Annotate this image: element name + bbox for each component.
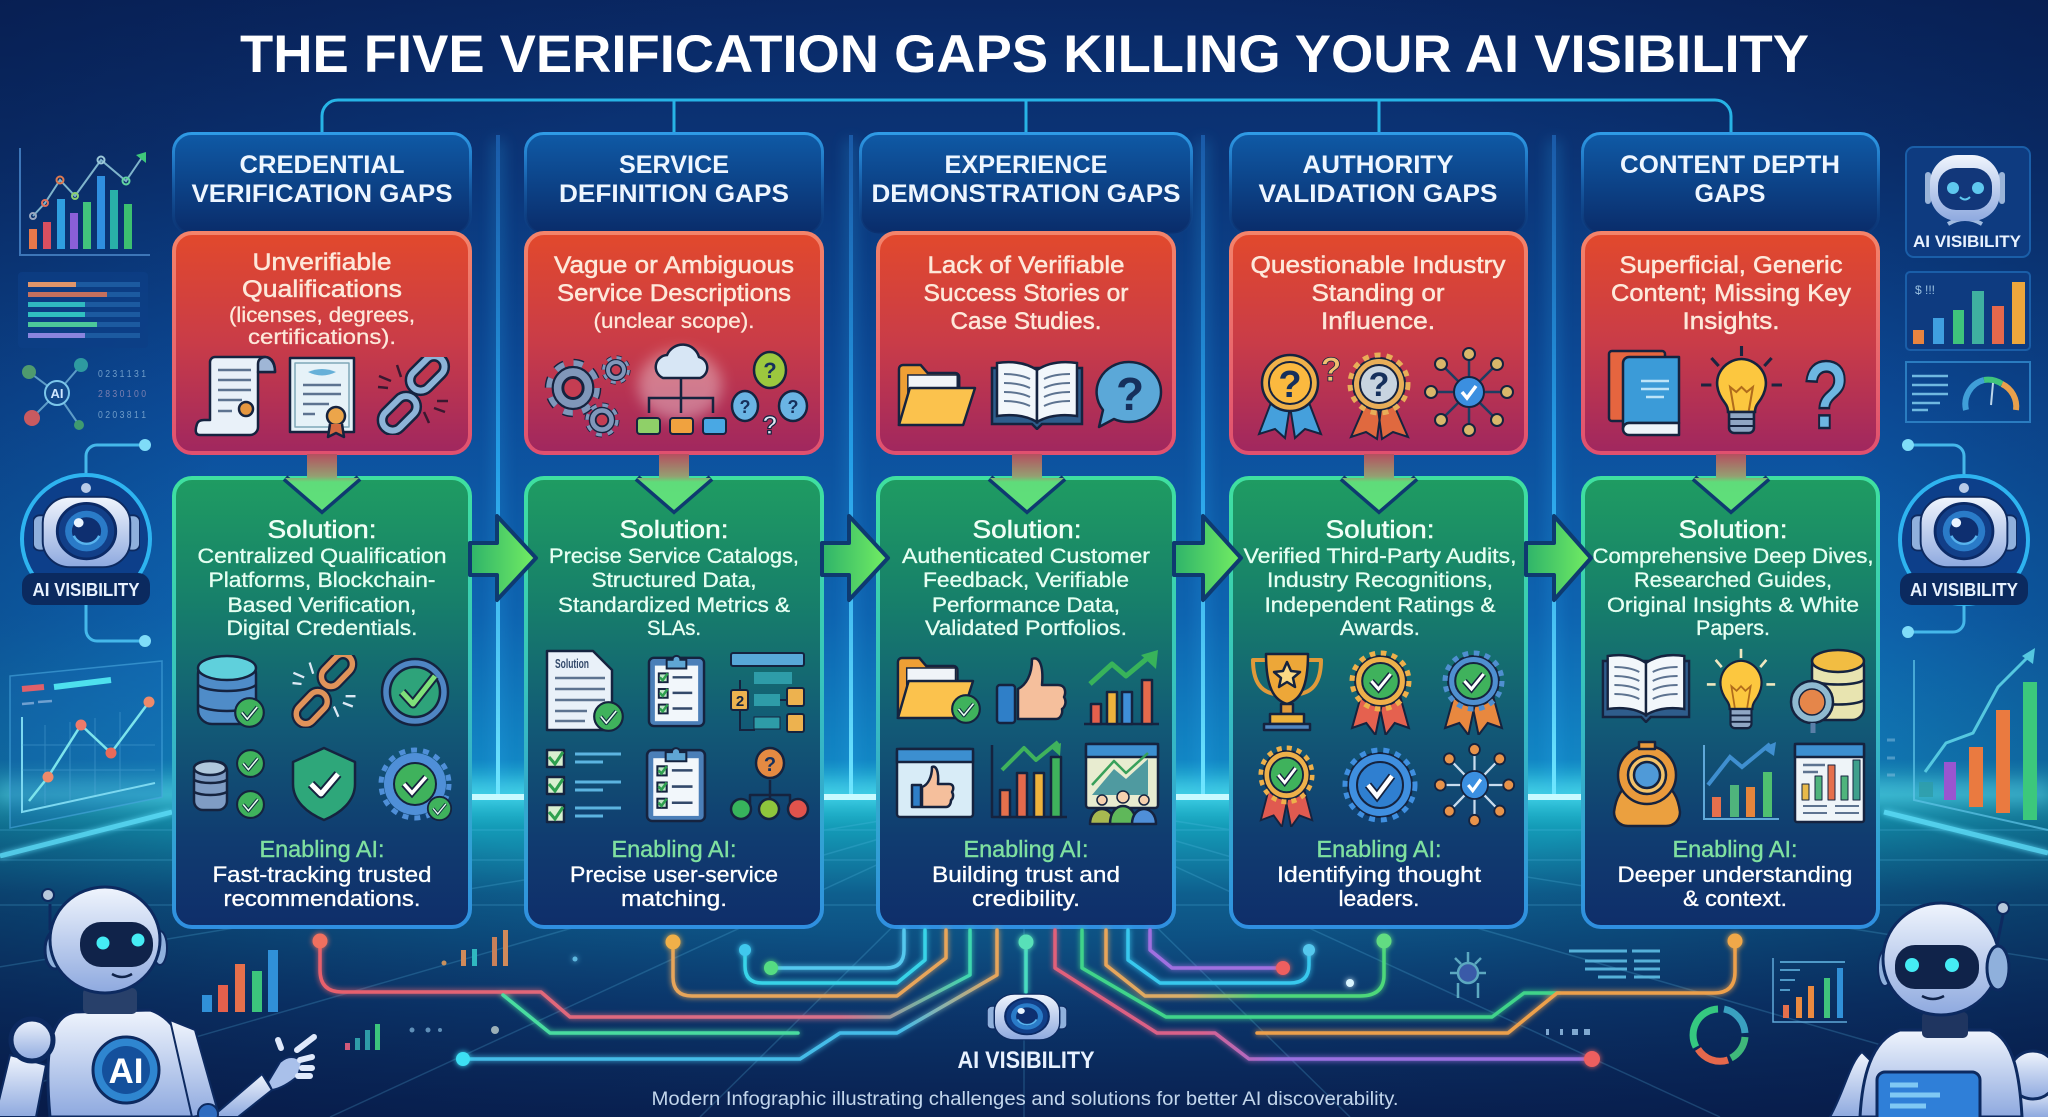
antenna [1996,902,2009,950]
header panel: SERVICE [619,151,729,179]
icon: shield [293,748,355,820]
header panel: DEFINITION GAPS [559,180,789,208]
icon: solution document: Solution [555,656,589,671]
icon: flowchart [731,653,804,732]
left decoration: growth chart [20,148,150,255]
right shoulder and arm [2009,1051,2048,1117]
icon: diving helmet [1614,742,1680,826]
column 3 solution panel: Enabling AI: [964,836,1088,862]
column 3 solution panel: Solution: [972,516,1082,544]
icon: check badge on database [235,698,264,727]
problem panel: Lack of Verifiable [928,252,1124,279]
forearm and hand [198,1037,314,1117]
column 4 solution panel: leaders. [1338,886,1420,911]
circuit end dots [312,934,1742,1067]
arrows: problem to solution [285,454,1768,510]
icon: growth chart two [992,742,1067,817]
right decoration: gauge panel [1906,362,2030,422]
left AI visibility robot badge [22,439,151,647]
left decoration: AI network and numbers: AI [50,386,64,401]
right decoration: AI visibility panel: AI VISIBILITY [1913,232,2022,251]
icon: network with check [1435,744,1514,826]
robot: left presenter [0,887,314,1117]
column 1 solution panel: Based Verification, [228,593,416,617]
data lines [1569,951,1660,977]
problem panel: Service Descriptions [557,280,791,307]
icon: solution document [547,651,623,731]
AI chest badge [93,1037,159,1103]
icon: trophy [1253,654,1321,730]
header panel: CONTENT DEPTH [1620,151,1840,179]
icon: scroll [196,357,275,435]
icon: gears [550,358,628,434]
column 5 solution panel: Papers. [1696,616,1770,640]
icon: orange chain [292,650,356,728]
left decoration: AI network and numbers: 0 2 3 1 1 3 1 [98,369,146,380]
icon: decision tree: ? [764,754,776,776]
column 2 solution panel: Precise Service Catalogs, [549,544,799,568]
column 1 solution panel [174,478,470,927]
problem panel [526,233,822,453]
dots [1546,1029,1590,1035]
column 2 solution panel: Structured Data, [592,568,756,592]
icon: network check [1425,348,1513,436]
problem panel: Content; Missing Key [1611,280,1851,307]
icon: rosette with question mark: ? [1369,366,1389,404]
right arm [170,1020,218,1117]
icon: blue badge [1345,750,1415,820]
header panel: AUTHORITY [1302,151,1454,179]
column 2 solution panel [526,478,822,927]
icon: rosette two [1261,748,1312,827]
bottom mini bar charts [202,930,508,1050]
icon: thumbs up [997,658,1065,723]
arrows: column to column [470,516,1591,600]
header panel: CREDENTIAL [240,151,404,179]
donut [1693,1009,1745,1061]
column 3: experience demonstration gaps [860,134,1192,453]
problem panel: Superficial, Generic [1620,252,1842,279]
right AI visibility robot badge: AI VISIBILITY [1910,580,2018,600]
column 4: authority validation gaps [1230,134,1526,453]
icon: open book [992,362,1082,429]
AI chest badge: AI [108,1052,144,1091]
column 2 solution panel: Solution: [620,516,728,544]
problem panel: (unclear scope). [594,310,754,333]
torso [1860,1030,2022,1117]
icon: database and magnifier [1791,650,1864,733]
center AI visibility robot: AI VISIBILITY [958,1047,1094,1074]
header panel [860,134,1192,234]
icon: report page [1795,744,1864,822]
chest screen [1877,1072,1980,1117]
icon: question bubbles: ? [740,397,750,417]
left decoration: perspective line chart [10,661,162,828]
icon: rosette with question mark [1350,355,1408,439]
column 3 solution panel: Authenticated Customer [902,544,1150,568]
column 2 solution panel: SLAs. [647,616,701,640]
left decoration: AI network and numbers: 2 8 3 0 1 0 0 [98,389,146,400]
column 5 solution panel: Enabling AI: [1672,836,1798,862]
problem panel [174,233,470,453]
column 1: credential verification gaps [174,134,470,453]
column 5 solution panel [1583,478,1878,927]
problem panel: Standing or [1312,280,1444,307]
icon: broken chain [378,352,449,435]
column 5 solution panel: Researched Guides, [1634,568,1832,592]
problem panel [1231,233,1526,453]
robot: right presenter [1830,902,2048,1117]
problem panel: (licenses, degrees, [229,304,415,327]
column 5 solution panel: Solution: [1678,516,1788,544]
column 3 solution panel: Validated Portfolios. [925,616,1127,640]
column 4 solution panel: Solution: [1326,516,1434,544]
left AI visibility robot badge: AI VISIBILITY [32,580,140,600]
column 1 solution panel: Digital Credentials. [226,616,418,640]
left decoration: horizontal bar panel [18,272,148,348]
icon: question speech bubble: ? [1116,368,1144,420]
header panel: EXPERIENCE [944,151,1108,179]
header panel [1582,134,1878,234]
icon: green rosette [1352,653,1409,735]
right decoration: rising bar chart [1887,648,2048,830]
problem panel: Insights. [1682,308,1780,335]
icon: question bubbles: ? [762,410,778,440]
shoulder [11,1019,53,1061]
column 1 solution panel: Centralized Qualification [198,544,446,568]
header panel [1230,134,1526,234]
icon: medal with question mark: ? [1321,351,1341,389]
column 4 solution panel: Industry Recognitions, [1267,568,1493,592]
column 2 solution panel: Enabling AI: [612,836,736,862]
circuit lines [320,930,1735,1059]
center AI visibility robot [958,994,1094,1074]
top connector lines [322,100,1731,132]
icon: books [1609,351,1679,435]
column 3 solution panel: credibility. [972,886,1080,911]
problem panel [1583,233,1878,453]
problem panel: Success Stories or [924,280,1129,307]
column 4 solution panel: Awards. [1340,616,1420,640]
icon: question bubbles: ? [788,397,798,417]
left decoration: AI network and numbers [22,358,146,430]
bottom right decorations [1450,951,1847,1061]
column 1 solution panel: Enabling AI: [260,836,384,862]
right decoration: bar chart panel: $ !!! [1915,283,1935,297]
icon: folder with check [898,658,980,723]
column 1 solution panel: Platforms, Blockchain- [208,568,436,592]
neck [83,988,137,1014]
column 4 solution panel: Enabling AI: [1316,836,1442,862]
column 5 solution panel: & context. [1683,886,1787,911]
column 5 solution panel: Original Insights & White [1607,593,1859,617]
head [1878,903,2009,1015]
column 4 solution panel: Independent Ratings & [1264,593,1496,617]
icon: database with check [198,656,256,724]
icon: growth chart [1704,742,1779,819]
icon: clipboard two [647,748,705,821]
header panel [526,134,822,234]
small chart [1773,958,1847,1022]
icon: browser chart with people [1086,744,1158,824]
icon: decision tree [731,748,808,819]
icon: seal with check [381,750,451,820]
icon: clipboard [649,656,704,726]
column 1 solution panel: Solution: [268,516,376,544]
header panel: VALIDATION GAPS [1258,180,1498,208]
icon: light bulb [1707,649,1775,728]
icon: chip [1450,952,1486,998]
problem panel: Case Studies. [950,308,1102,335]
left decoration: AI network and numbers: 0 2 0 3 8 1 1 [98,410,146,421]
icon: blue rosette [1445,653,1502,735]
head [45,887,167,993]
column 1 solution panel: Fast-tracking trusted [212,862,432,887]
icon: certificate [290,358,354,437]
column 2 solution panel: Precise user-service [570,862,778,887]
right AI visibility robot badge [1900,439,2028,638]
icon: growth chart [1084,650,1159,724]
column 2 solution panel: Standardized Metrics & [558,593,790,617]
header panel [174,134,470,234]
column 5: content depth gaps [1582,134,1878,453]
column 4 solution panel: Identifying thought [1277,862,1482,887]
header panel: VERIFICATION GAPS [192,180,452,208]
header panel: DEMONSTRATION GAPS [872,180,1180,208]
icon: question bubbles: ? [763,358,777,383]
caption: Modern Infographic illustrating challenges and solutions for better AI discoverability. [652,1089,1398,1110]
column 2 solution panel: matching. [621,886,727,911]
column 2: service definition gaps [526,134,822,453]
problem panel [878,233,1174,453]
column 3 solution panel: Performance Data, [932,593,1120,617]
header panel: GAPS [1694,180,1766,208]
icon: question speech bubble [1097,362,1161,427]
left arm [1830,1052,1870,1117]
title: THE FIVE VERIFICATION GAPS KILLING YOUR AI VISIBILITY [240,25,1809,84]
column 3 solution panel: Building trust and [932,862,1120,887]
right decoration: AI visibility panel [1906,147,2030,257]
problem panel: certifications). [248,326,396,349]
problem panel: Questionable Industry [1250,252,1506,279]
column 4 solution panel [1231,478,1526,927]
icon: check circle [382,659,448,725]
column 5 solution panel: Comprehensive Deep Dives, [1592,544,1874,568]
icon: medal with question mark: ? [1278,364,1302,406]
torso [48,1010,196,1117]
icon: browser with thumbs up [897,749,973,817]
problem panel: Qualifications [242,276,402,303]
icon: question bubbles [732,352,807,440]
icon: large question mark: ? [1803,342,1849,449]
right decoration: bar chart panel [1906,272,2030,350]
problem panel: Influence. [1321,308,1435,335]
column 3 solution panel: Feedback, Verifiable [923,568,1129,592]
icon: folder [899,365,975,425]
icon: flowchart: 2 [736,693,744,710]
left arm [0,1055,46,1117]
icon: open book [1603,655,1689,722]
problem panel: Vague or Ambiguous [554,252,794,279]
icon: medal with question mark [1259,351,1341,438]
column 5 solution panel: Deeper understanding [1618,862,1852,887]
antenna [42,889,54,930]
icon: database and two checks [194,750,264,818]
column 4 solution panel: Verified Third-Party Audits, [1244,544,1516,568]
neck [1922,1012,1968,1038]
column 3 solution panel [878,478,1174,927]
icon: cloud hierarchy [637,345,726,434]
icon: checklist [547,750,621,822]
column 1 solution panel: recommendations. [224,886,420,911]
problem panel: Unverifiable [252,249,392,276]
icon: light bulb [1701,346,1782,433]
